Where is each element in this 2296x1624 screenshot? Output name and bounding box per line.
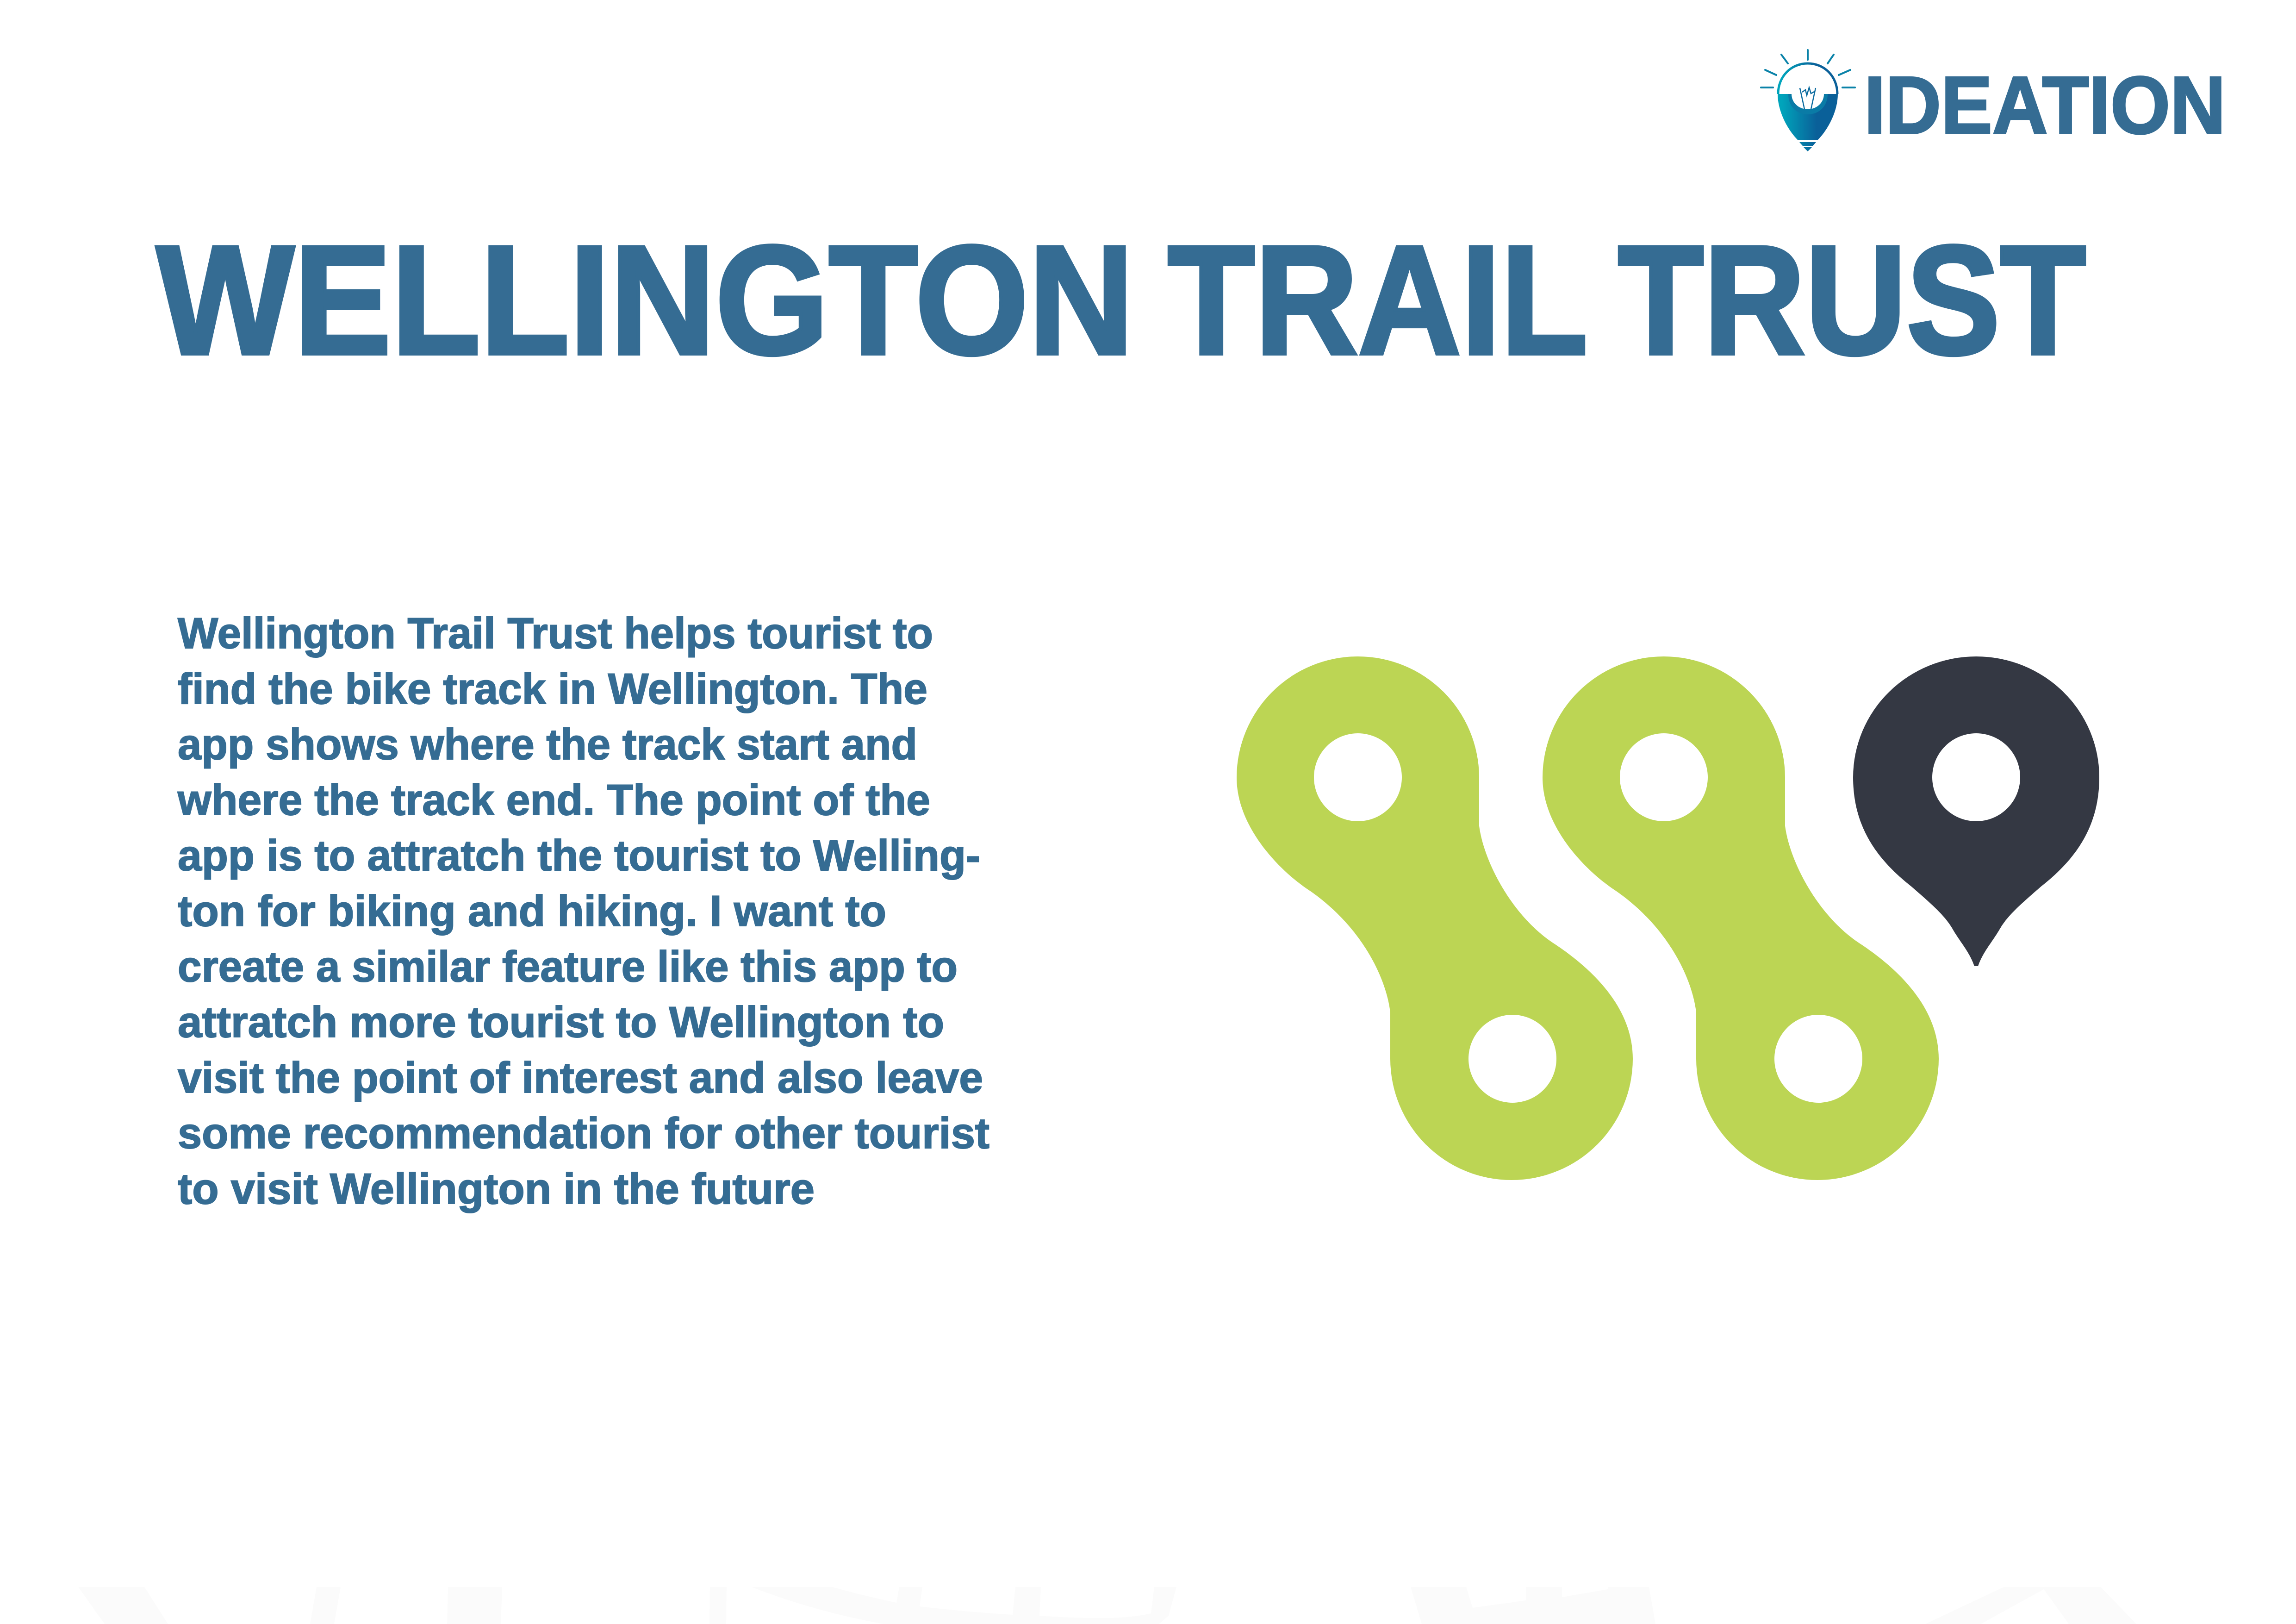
description text block: visit the point of interest and also leave: [178, 1053, 983, 1102]
title: WELLINGTON: [156, 213, 1134, 387]
description text block: app shows where the track start and: [178, 720, 917, 768]
title: [156, 213, 2086, 387]
title: TRUST: [1618, 213, 2086, 387]
icon: light bulb pin: [1761, 50, 1855, 151]
wordmark: IDEATION: IDEATION: [1864, 60, 2226, 151]
Wellington Trail Trust logo mark: [1237, 656, 2099, 1180]
title: TRAIL: [1168, 213, 1588, 387]
description text block: attratch more tourist to Wellington to: [178, 998, 944, 1046]
description text block: where the track end. The point of the: [177, 775, 930, 824]
description text block: find the bike track in Wellington. The: [178, 664, 927, 713]
description text block: Wellington Trail Trust helps tourist to: [178, 609, 933, 657]
logo: Ideation: [1761, 50, 2226, 151]
description text block: to visit Wellington in the future: [178, 1164, 815, 1213]
icon: first chain link: [1237, 656, 1633, 1180]
description text block: some recommendation for other tourist: [178, 1109, 989, 1157]
icon: second chain link: [1543, 656, 1939, 1180]
description text block: ton for biking and hiking. I want to: [178, 887, 886, 935]
description text block: [177, 609, 989, 1213]
watermark: faint letters along bottom edge: [78, 1587, 2136, 1624]
description text block: create a similar feature like this app to: [178, 942, 958, 991]
icon: map pin: [1853, 656, 2099, 966]
description text block: app is to attratch the tourist to Welling-: [178, 831, 980, 880]
